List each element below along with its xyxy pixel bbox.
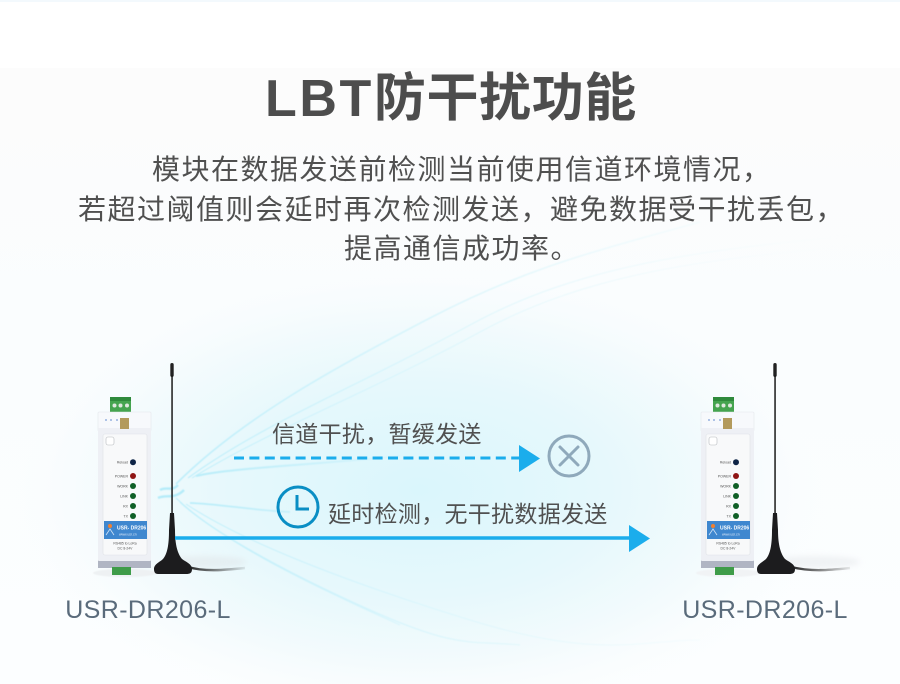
description text: 模块在数据发送前检测当前使用信道环境情况， xyxy=(152,154,772,185)
module housing xyxy=(98,412,151,568)
indicator LEDs: TX xyxy=(727,514,732,518)
indicator LEDs: WORK xyxy=(117,484,129,488)
delayed send label: 延时检测，无干扰数据发送 xyxy=(328,501,608,527)
description text: 若超过阈值则会延时再次检测发送，避免数据受干扰丢包， xyxy=(78,194,845,225)
description text: 提高通信成功率。 xyxy=(344,233,580,264)
indicator LEDs: RX xyxy=(123,504,129,508)
blue brand label: www.usr.cn xyxy=(119,532,137,536)
module housing xyxy=(701,412,754,568)
blue brand label: USR- DR206 xyxy=(720,526,749,532)
indicator LEDs: POWER xyxy=(718,474,731,478)
left device name: USR-DR206-L xyxy=(65,596,231,624)
top green terminal xyxy=(713,397,734,412)
indicator LEDs: Reload xyxy=(720,460,731,464)
signal wave wisps xyxy=(158,222,870,645)
model caption xyxy=(716,542,740,550)
indicator LEDs: LINK xyxy=(120,494,129,498)
interference label: 信道干扰，暂缓发送 xyxy=(272,421,482,447)
solid arrow: successful transmission xyxy=(175,525,650,552)
blue brand label: www.usr.cn xyxy=(722,532,740,536)
right antenna xyxy=(757,363,860,574)
right device name: USR-DR206-L xyxy=(682,596,848,624)
model caption: DC 8-24V xyxy=(118,546,133,550)
indicator LEDs: RX xyxy=(726,504,732,508)
model caption xyxy=(113,542,137,550)
indicator LEDs: WORK xyxy=(720,484,732,488)
model caption: RS485 to LoRa xyxy=(113,542,137,546)
indicator LEDs: TX xyxy=(124,514,129,518)
bottom green terminal xyxy=(112,567,131,575)
dashed arrow: blocked transmission xyxy=(234,445,540,472)
SMA connector xyxy=(723,418,732,429)
indicator LEDs xyxy=(718,459,739,519)
blue brand label: USR- DR206 xyxy=(117,526,146,532)
icon: clock xyxy=(278,487,318,527)
indicator LEDs: Reload xyxy=(117,460,128,464)
indicator LEDs xyxy=(115,459,136,519)
indicator LEDs: LINK xyxy=(723,494,732,498)
blue brand label xyxy=(104,521,147,539)
blue brand label xyxy=(707,521,750,539)
icon: blocked cross xyxy=(549,436,589,476)
model caption: DC 8-24V xyxy=(721,546,736,550)
title: LBT防干扰功能 xyxy=(265,70,637,128)
right device: USR-DR206 module xyxy=(696,397,760,577)
top green terminal xyxy=(110,397,131,412)
left antenna xyxy=(154,363,247,574)
indicator LEDs: POWER xyxy=(115,474,128,478)
bottom green terminal xyxy=(715,567,734,575)
left device: USR-DR206 module xyxy=(93,397,157,577)
model caption: RS485 to LoRa xyxy=(716,542,740,546)
SMA connector xyxy=(120,418,129,429)
description text xyxy=(78,154,845,264)
